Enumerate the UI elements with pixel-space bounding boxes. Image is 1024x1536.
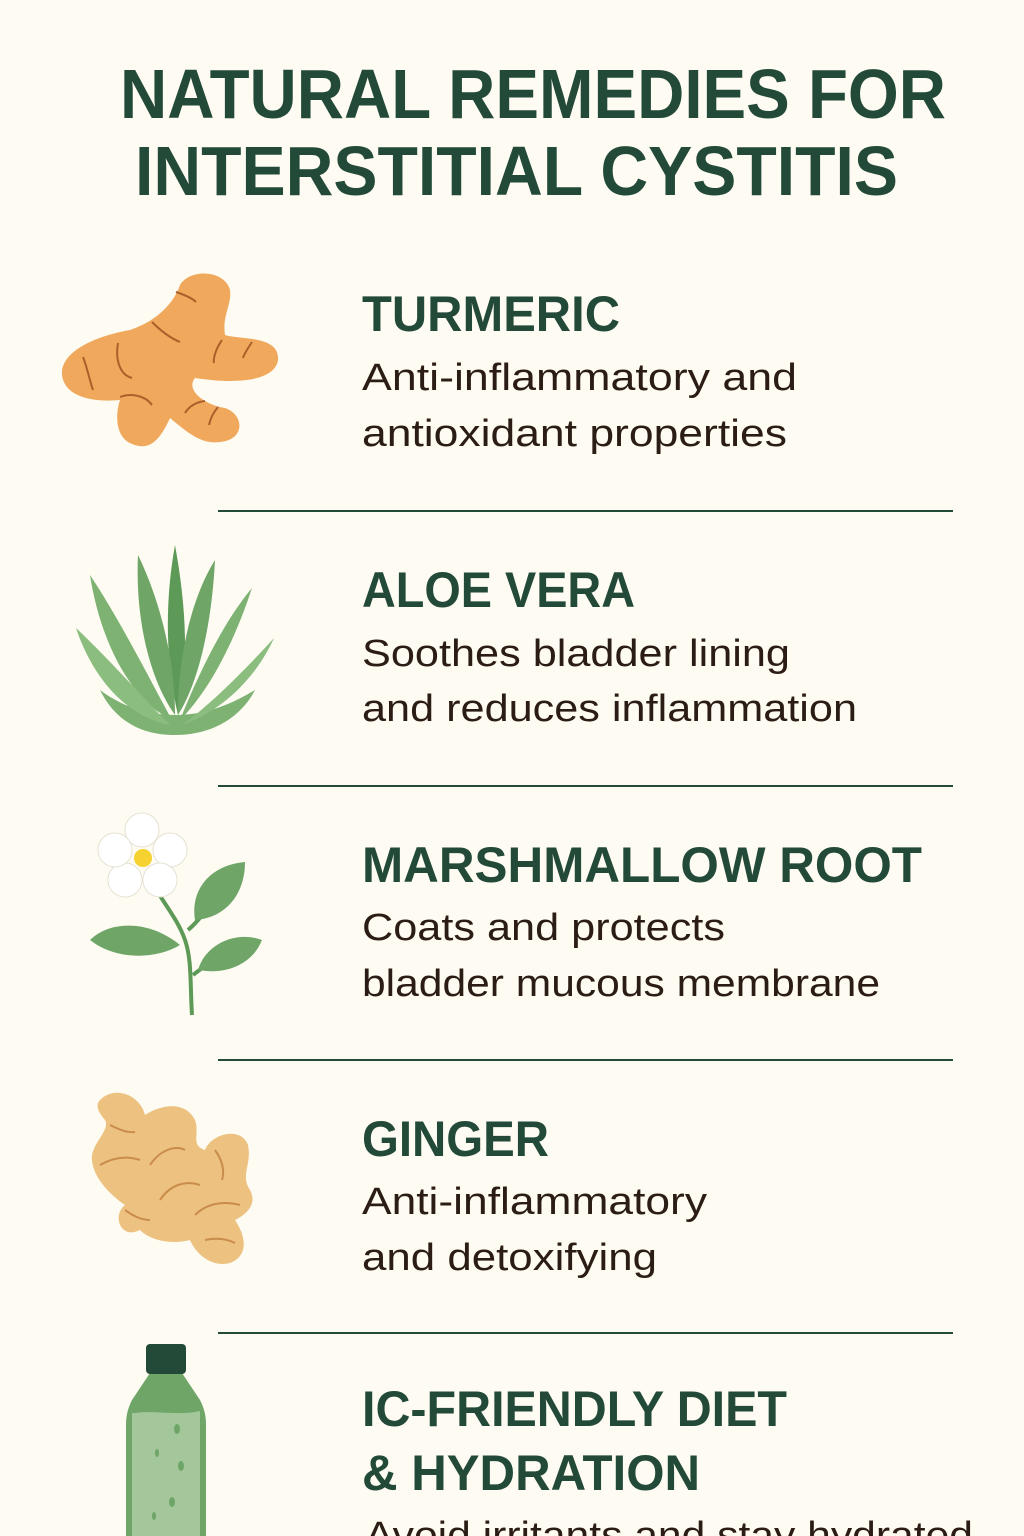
text: marshmallow root: MARSHMALLOW ROOT bbox=[362, 837, 922, 893]
text: ginger: and detoxifying bbox=[362, 1237, 657, 1279]
text: ginger: Anti-inflammatory bbox=[362, 1181, 707, 1223]
icon: water bottle bbox=[126, 1344, 206, 1536]
text: IC-friendly diet: IC-FRIENDLY DIET bbox=[362, 1381, 787, 1437]
title bbox=[120, 55, 946, 210]
text: marshmallow root bbox=[362, 837, 922, 1005]
text: aloe vera: Soothes bladder lining bbox=[362, 633, 790, 675]
text: ginger bbox=[362, 1111, 707, 1279]
divider bbox=[218, 1059, 953, 1061]
icon: ginger bbox=[92, 1093, 252, 1264]
text: IC-friendly diet: & HYDRATION bbox=[362, 1445, 700, 1501]
icon: aloe vera bbox=[76, 545, 274, 735]
text: turmeric: Anti-inflammatory and bbox=[362, 357, 797, 399]
divider bbox=[218, 1332, 953, 1334]
text: marshmallow root: bladder mucous membrane bbox=[362, 963, 880, 1005]
text: turmeric: antioxidant properties bbox=[362, 413, 787, 455]
title: NATURAL REMEDIES FOR bbox=[120, 55, 946, 133]
divider bbox=[218, 510, 953, 512]
icon: marshmallow flower bbox=[90, 813, 262, 1015]
text: aloe vera: and reduces inflammation bbox=[362, 688, 857, 730]
text: turmeric bbox=[362, 286, 797, 455]
divider bbox=[218, 785, 953, 787]
text: IC-friendly diet bbox=[362, 1381, 973, 1536]
text: aloe vera: ALOE VERA bbox=[362, 562, 635, 618]
title: INTERSTITIAL CYSTITIS bbox=[135, 132, 898, 210]
text: aloe vera bbox=[362, 562, 857, 730]
icon: turmeric bbox=[62, 274, 278, 446]
text: turmeric: TURMERIC bbox=[362, 286, 620, 342]
text: marshmallow root: Coats and protects bbox=[362, 907, 725, 949]
text: ginger: GINGER bbox=[362, 1111, 549, 1167]
